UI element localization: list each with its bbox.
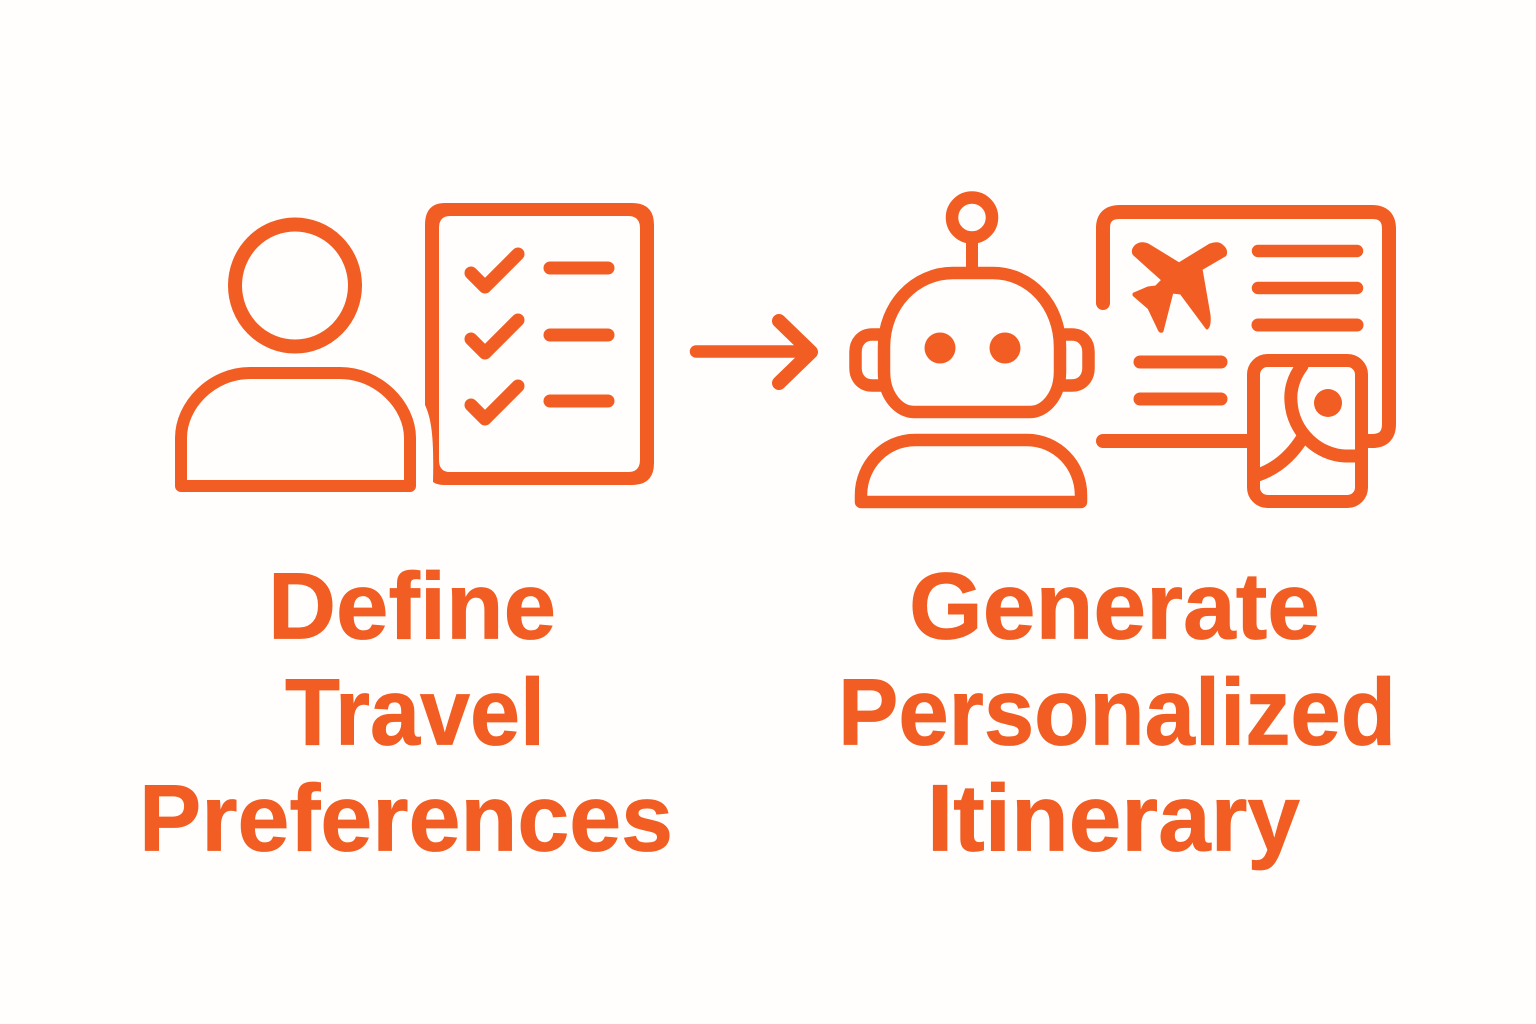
ticket text lines left	[1140, 362, 1221, 399]
icon: map on phone	[1254, 360, 1362, 502]
heading: step 1: Preferences	[139, 766, 673, 872]
checklist row 2	[471, 320, 608, 353]
ticket outline	[1103, 212, 1389, 441]
robot left eye	[924, 332, 956, 364]
checklist row 3	[471, 386, 608, 419]
heading: step 2	[838, 554, 1396, 872]
arrow	[696, 321, 811, 383]
icon: person	[181, 224, 410, 486]
robot body	[861, 440, 1081, 502]
heading: step 1	[139, 554, 673, 872]
heading: step 1: Travel	[285, 660, 545, 766]
heading: step 2: Personalized	[838, 660, 1396, 766]
robot antenna	[952, 198, 992, 270]
checklist row 1	[471, 254, 608, 287]
map pin dot	[1314, 389, 1342, 417]
icon: checklist	[425, 203, 654, 485]
map road curve	[1291, 366, 1358, 456]
icon: flight ticket	[1103, 212, 1389, 502]
phone frame	[1254, 360, 1362, 502]
robot right ear	[1060, 334, 1088, 386]
airplane	[1133, 244, 1226, 331]
icon: robot	[856, 198, 1088, 502]
person head	[235, 224, 355, 346]
robot head	[884, 273, 1060, 412]
heading: step 2: Generate	[909, 554, 1320, 660]
robot left ear	[856, 334, 884, 386]
heading: step 2: Itinerary	[927, 766, 1300, 872]
ticket text lines right	[1258, 251, 1357, 325]
person body	[181, 373, 410, 486]
robot right eye	[990, 332, 1020, 364]
checklist page	[425, 203, 654, 485]
ticket bottom edge	[1103, 434, 1250, 448]
heading: step 1: Define	[268, 554, 556, 660]
map road branch	[1258, 437, 1303, 475]
